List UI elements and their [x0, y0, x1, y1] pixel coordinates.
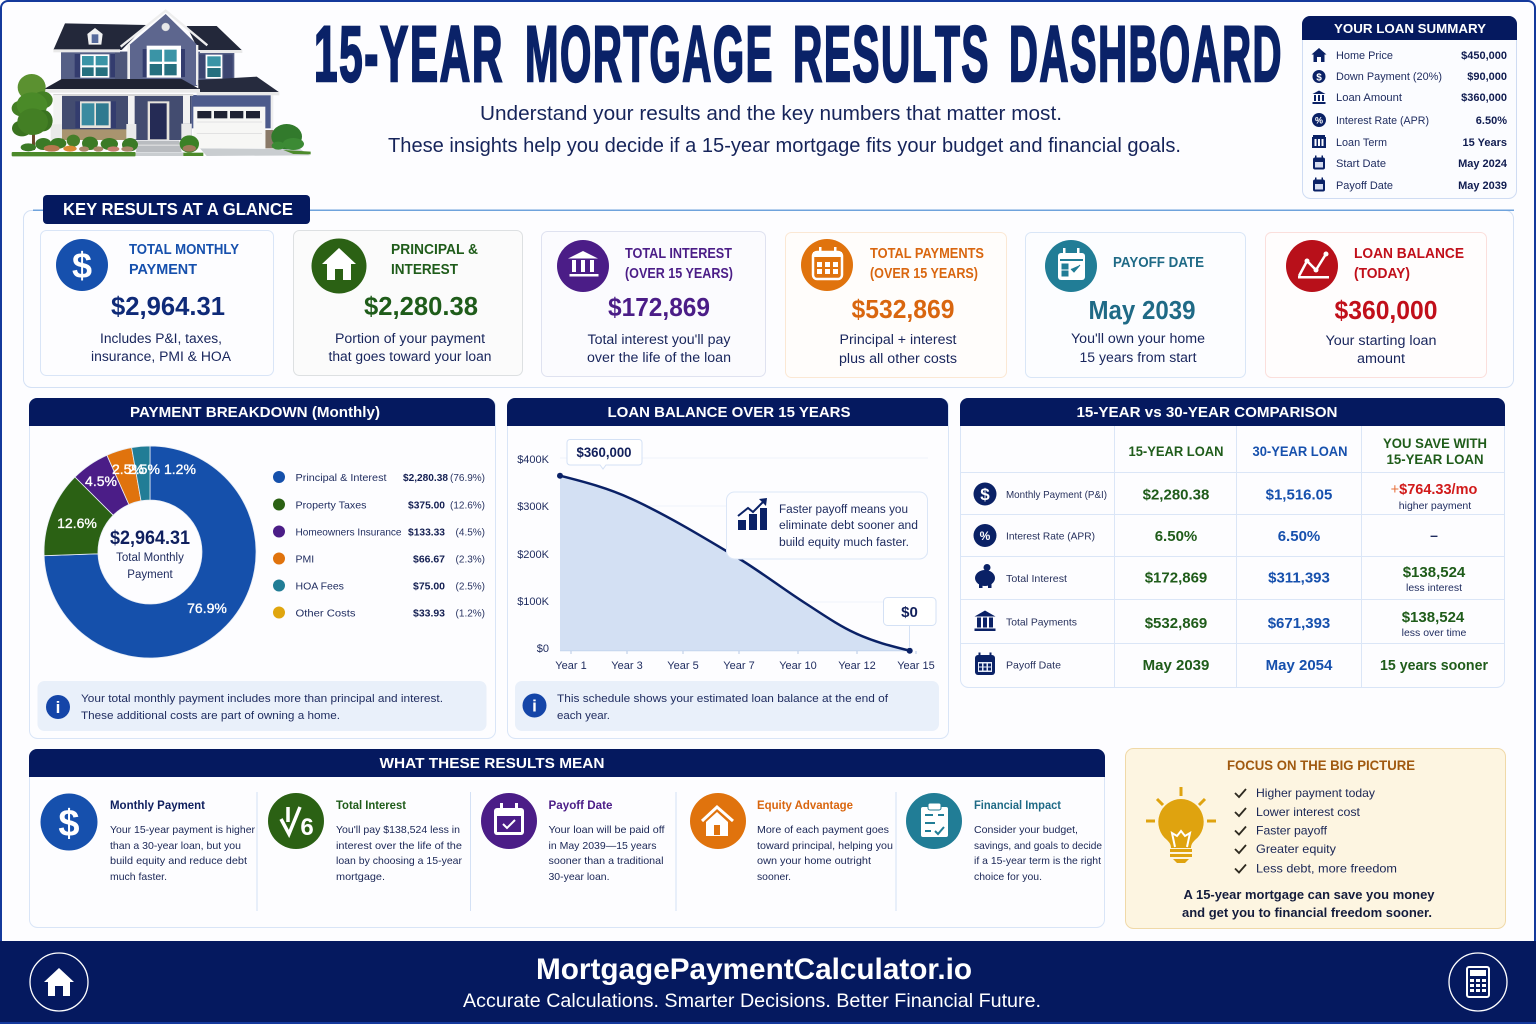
item: financial impact: [906, 793, 1102, 883]
panel: focus on the big picture: [1126, 748, 1506, 928]
info note: i: [532, 696, 537, 716]
item: total interest: [268, 793, 462, 883]
card: total payments: plus all other costs: [839, 351, 957, 366]
line chart: $200K: [517, 549, 550, 561]
heading: key results: KEY RESULTS AT A GLANCE: [63, 199, 293, 219]
card: payoff date: You'll own your home: [1071, 331, 1205, 346]
table header: YOU SAVE WITH: [1383, 436, 1487, 451]
card: total payments: [786, 232, 1006, 378]
table header: 15-YEAR LOAN: [1386, 452, 1484, 467]
icon: start date: [1313, 156, 1325, 170]
footer band: [0, 941, 1536, 1024]
legend: $66.67: [413, 554, 445, 566]
item: monthly payment: Monthly Payment: [110, 798, 205, 812]
legend: $75.00: [413, 580, 445, 592]
card: loan balance: [1266, 232, 1486, 378]
legend: (76.9%): [450, 473, 485, 484]
table header: 30-YEAR LOAN: [1252, 444, 1348, 459]
legend: $2,280.38: [403, 472, 448, 484]
heading: key results: [43, 195, 310, 224]
row: monthly payment: [974, 482, 1477, 512]
card: total monthly payment: Includes P&I, taxes,: [100, 331, 222, 346]
checklist: Faster payoff: [1256, 824, 1328, 838]
item: monthly payment: $: [58, 803, 80, 845]
row: monthly payment: Monthly Payment (P&I): [1006, 489, 1107, 501]
card: payoff date: [1026, 232, 1246, 378]
panel: your loan summary: Payoff Date: [1336, 180, 1393, 192]
line chart: $300K: [517, 501, 550, 513]
row: interest rate: Interest Rate (APR): [1006, 530, 1095, 542]
panel: your loan summary: Home Price: [1336, 50, 1393, 62]
card: total payments: $532,869: [852, 296, 954, 324]
item: payoff date: 30-year loan.: [548, 871, 610, 883]
card: loan balance: LOAN BALANCE: [1354, 246, 1464, 262]
line chart: [517, 454, 935, 672]
panel: key results at a glance: [24, 195, 1514, 388]
subtitle: Understand your results and the key numbers that matter most.: [480, 102, 1062, 125]
line chart: $0: [537, 643, 549, 655]
info note: [38, 681, 486, 731]
icon: down payment: $: [1316, 72, 1322, 84]
donut labels: 4.5%: [85, 473, 117, 489]
heading: loan balance: LOAN BALANCE OVER 15 YEARS: [608, 404, 850, 421]
item: equity advantage: [690, 793, 893, 883]
item: monthly payment: than a 30-year loan, but you: [110, 840, 241, 852]
icon: home: [312, 238, 366, 294]
panel: your loan summary: [1302, 16, 1517, 198]
panel: focus on the big picture: FOCUS ON THE BIG PICTURE: [1227, 758, 1415, 773]
card: total monthly payment: insurance, PMI & HOA: [91, 349, 231, 364]
callout: $0: [884, 598, 936, 648]
row: interest rate: 6.50%: [1278, 528, 1320, 545]
panel: what these results mean: [29, 749, 1105, 928]
icon: calendar: [801, 239, 853, 291]
legend: Homeowners Insurance: [296, 526, 402, 538]
panel: your loan summary: Start Date: [1336, 158, 1386, 170]
item: monthly payment: [40, 794, 255, 883]
heading: loan balance: [507, 398, 948, 426]
legend: PMI: [296, 554, 314, 566]
checklist: Lower interest cost: [1256, 805, 1361, 819]
row: total interest: $311,393: [1268, 570, 1330, 586]
icon: calendar check: [1045, 240, 1097, 292]
card: payoff date: 15 years from start: [1080, 350, 1197, 365]
item: total interest: loan by choosing a 15-year: [336, 855, 462, 867]
callout: $360,000: [567, 440, 642, 469]
icon: bank: [557, 240, 609, 292]
row: payoff date: May 2039: [1143, 657, 1209, 674]
card: loan balance: (TODAY): [1354, 266, 1410, 282]
panel: your loan summary: $360,000: [1461, 92, 1507, 104]
item: payoff date: [481, 793, 665, 883]
callout: faster payoff: build equity much faster.: [779, 537, 909, 549]
icon: interest rate: [1312, 113, 1326, 127]
legend: Principal & Interest: [296, 472, 387, 484]
panel: your loan summary: $450,000: [1461, 50, 1507, 62]
item: monthly payment: Your 15-year payment is higher: [110, 824, 255, 836]
heading: comparison: [960, 398, 1505, 426]
item: payoff date: Payoff Date: [548, 798, 613, 812]
row: monthly payment: $2,280.38: [1143, 486, 1209, 504]
row: interest rate: –: [1430, 527, 1438, 543]
heading: what these results mean: WHAT THESE RESULTS MEAN: [380, 755, 604, 772]
panel: loan balance over 15 years: [507, 398, 948, 738]
row: payoff date: [975, 652, 1488, 675]
panel: your loan summary: 6.50%: [1476, 115, 1507, 127]
card: total payments: TOTAL PAYMENTS: [870, 246, 984, 262]
icon: footer home: [30, 953, 88, 1011]
donut center total: Payment: [127, 569, 173, 581]
checklist: [1235, 786, 1397, 876]
legend: (12.6%): [450, 500, 485, 512]
card: total monthly payment: $2,964.31: [111, 293, 225, 321]
panel: 15-year vs 30-year comparison: [960, 398, 1505, 688]
callout: faster payoff: eliminate debt sooner and: [779, 520, 918, 532]
row: total payments: less over time: [1402, 627, 1467, 639]
line chart: Year 5: [667, 660, 699, 672]
legend: (2.5%): [456, 582, 485, 592]
item: total interest: 6: [300, 814, 314, 841]
heading: payment breakdown: PAYMENT BREAKDOWN (Monthly): [130, 404, 380, 421]
item: financial impact: if a 15-year term is the right: [974, 855, 1101, 867]
donut labels: [57, 461, 227, 616]
card: total monthly payment: PAYMENT: [129, 262, 197, 278]
row: payoff date: 15 years sooner: [1380, 658, 1488, 674]
legend: Property Taxes: [296, 500, 366, 512]
row: total payments: [974, 609, 1467, 639]
item: equity advantage: Equity Advantage: [757, 798, 853, 812]
card: total payments: Principal + interest: [840, 332, 957, 347]
line chart: $400K: [517, 454, 550, 466]
closing statement: A 15-year mortgage can save you money: [1184, 887, 1435, 902]
row: total interest: less interest: [1406, 582, 1462, 594]
callout: $0: $0: [901, 604, 918, 621]
item: financial impact: Financial Impact: [974, 798, 1061, 812]
callout: faster payoff: [726, 492, 928, 559]
row: monthly payment: $1,516.05: [1266, 486, 1332, 504]
row: interest rate: %: [980, 529, 991, 543]
line chart: Year 3: [611, 660, 643, 672]
illustration: house: [12, 11, 311, 156]
line chart: Year 1: [555, 660, 587, 672]
item: total interest: Total Interest: [336, 798, 406, 812]
icon: loan amount bank: [1312, 90, 1326, 104]
row: total interest: Total Interest: [1006, 573, 1067, 585]
card: total interest: Total interest you'll pay: [588, 332, 731, 347]
row: interest rate: 6.50%: [1155, 528, 1197, 545]
checklist: Less debt, more freedom: [1256, 862, 1397, 876]
card: total interest: [542, 232, 766, 376]
item: financial impact: Consider your budget,: [974, 824, 1078, 836]
row: total payments: $671,393: [1268, 615, 1330, 632]
card: principal and interest: [294, 230, 522, 376]
footer brand: MortgagePaymentCalculator.io: [536, 953, 972, 986]
icon: light bulb: [1146, 787, 1216, 863]
card: total monthly payment: TOTAL MONTHLY: [129, 242, 239, 258]
panel: your loan summary: Down Payment (20%): [1336, 71, 1442, 83]
item: equity advantage: own your home outright: [757, 855, 871, 867]
icon: loan term: [1312, 135, 1326, 148]
item: payoff date: Your loan will be paid off: [548, 824, 665, 836]
row: total payments: $138,524: [1402, 609, 1465, 626]
heading: what these results mean: [29, 749, 1105, 777]
panel: your loan summary: May 2039: [1458, 180, 1507, 192]
item: payoff date: in May 2039—15 years: [548, 840, 656, 852]
item: financial impact: choice for you.: [974, 871, 1042, 883]
donut labels: 2.5%: [128, 461, 160, 477]
row: total interest: $172,869: [1145, 570, 1207, 586]
row: total payments: Total Payments: [1006, 616, 1077, 628]
icon: line chart: [1286, 240, 1338, 292]
card: loan balance: Your starting loan: [1326, 333, 1436, 348]
info note: This schedule shows your estimated loan balance at the end of: [557, 693, 889, 705]
donut center total: $2,964.31: [110, 528, 190, 549]
info note: [515, 681, 939, 731]
card: total interest: $172,869: [608, 294, 710, 322]
item: total interest: mortgage.: [336, 871, 385, 883]
card: principal and interest: PRINCIPAL &: [391, 242, 478, 258]
icon: home price: [1312, 48, 1326, 62]
card: total payments: (OVER 15 YEARS): [870, 266, 978, 282]
card: principal and interest: $2,280.38: [364, 293, 478, 321]
title: RESULTS: [793, 9, 990, 98]
legend: [273, 471, 485, 620]
legend: (2.3%): [456, 554, 485, 566]
card: loan balance: $360,000: [1334, 297, 1438, 325]
card: principal and interest: INTEREST: [391, 262, 458, 278]
donut labels: 2.5%: [112, 461, 144, 477]
row: monthly payment: higher payment: [1399, 500, 1471, 512]
panel: payment breakdown: [29, 398, 496, 738]
panel: your loan summary: Interest Rate (APR): [1336, 115, 1429, 127]
heading: comparison: 15-YEAR vs 30-YEAR COMPARISON: [1076, 404, 1338, 421]
panel: your loan summary: $90,000: [1467, 71, 1507, 83]
panel: your loan summary: Loan Amount: [1336, 92, 1402, 104]
card: payoff date: PAYOFF DATE: [1113, 255, 1204, 271]
closing statement: [1182, 887, 1435, 920]
row: payoff date: Payoff Date: [1006, 660, 1061, 672]
legend: Other Costs: [296, 608, 356, 620]
row: monthly payment: $: [980, 485, 990, 504]
heading: payment breakdown: [29, 398, 495, 426]
item: total interest: You'll pay $138,524 less in: [336, 824, 460, 836]
donut labels: 12.6%: [57, 515, 97, 531]
icon: payoff date: [1313, 178, 1325, 192]
icon: dollar: [56, 239, 108, 291]
info note: i: [56, 698, 60, 717]
line chart: $100K: [517, 596, 550, 608]
line chart: Year 7: [723, 660, 755, 672]
panel: your loan summary: May 2024: [1458, 158, 1508, 170]
panel: your loan summary: Loan Term: [1336, 137, 1387, 149]
title: 15-YEAR: [314, 9, 504, 98]
item: equity advantage: More of each payment goes: [757, 824, 889, 836]
card: principal and interest: Portion of your payment: [335, 331, 485, 346]
item: monthly payment: much faster.: [110, 871, 167, 883]
panel: your loan summary: 15 Years: [1463, 137, 1507, 149]
card: principal and interest: that goes toward your loan: [328, 349, 492, 364]
legend: $375.00: [408, 500, 445, 512]
legend: $33.93: [413, 608, 445, 620]
card: loan balance: amount: [1357, 351, 1405, 366]
item: total interest: interest over the life of the: [336, 840, 462, 852]
donut center total: [110, 528, 190, 581]
row: total interest: [975, 564, 1466, 594]
legend: $133.33: [408, 526, 445, 538]
item: equity advantage: sooner.: [757, 871, 791, 883]
card: total interest: over the life of the loan: [587, 350, 731, 365]
callout: faster payoff: Faster payoff means you: [779, 504, 908, 516]
icon: down payment: [1312, 70, 1326, 84]
legend: HOA Fees: [296, 580, 344, 592]
line chart: Year 10: [779, 660, 817, 672]
row: total payments: $532,869: [1145, 615, 1207, 632]
title: [314, 9, 1283, 98]
title: DASHBOARD: [1009, 9, 1283, 98]
item: payoff date: sooner than a traditional: [548, 855, 664, 867]
card: total interest: (OVER 15 YEARS): [625, 266, 733, 282]
row: total interest: $138,524: [1403, 564, 1466, 581]
table header: 15-YEAR LOAN: [1128, 444, 1224, 459]
checklist: Greater equity: [1256, 842, 1336, 856]
callout: $360,000: $360,000: [576, 444, 632, 460]
subtitle: [388, 102, 1181, 157]
icon: growth bars: [738, 498, 767, 530]
card: total interest: TOTAL INTEREST: [625, 246, 732, 262]
info note: each year.: [557, 710, 610, 722]
icon: dollar: $: [72, 245, 92, 286]
closing statement: and get you to financial freedom sooner.: [1182, 905, 1432, 920]
panel: your loan summary: YOUR LOAN SUMMARY: [1334, 21, 1486, 36]
row: monthly payment: +$764.33/mo: [1391, 482, 1477, 498]
donut center total: Total Monthly: [116, 552, 184, 564]
info note: These additional costs are part of owning a home.: [81, 710, 340, 722]
legend: (4.5%): [456, 528, 485, 538]
item: financial impact: savings, and goals to decide: [974, 840, 1102, 852]
item: monthly payment: build equity and reduce debt: [110, 855, 247, 867]
donut labels: 1.2%: [164, 461, 196, 477]
icon: footer calculator: [1449, 953, 1507, 1011]
card: total monthly payment: [40, 230, 274, 376]
line chart: Year 12: [838, 660, 876, 672]
line chart: Year 15: [897, 660, 935, 672]
card: payoff date: May 2039: [1088, 297, 1196, 325]
donut labels: 76.9%: [187, 600, 227, 616]
donut chart: [44, 446, 256, 658]
row: payoff date: May 2054: [1266, 657, 1333, 674]
icon: interest rate: %: [1315, 116, 1323, 126]
table header: [1128, 436, 1487, 467]
footer tagline: Accurate Calculations. Smarter Decisions. Better Financial Future.: [463, 991, 1041, 1012]
legend: (1.2%): [456, 608, 485, 620]
checklist: Higher payment today: [1256, 786, 1375, 800]
title: MORTGAGE: [525, 9, 774, 98]
row: interest rate: [974, 524, 1438, 547]
item: equity advantage: toward principal, helping you: [757, 840, 893, 852]
info note: Your total monthly payment includes more than principal and interest.: [81, 693, 443, 705]
subtitle: These insights help you decide if a 15-year mortgage fits your budget and financial goals.: [388, 134, 1181, 157]
